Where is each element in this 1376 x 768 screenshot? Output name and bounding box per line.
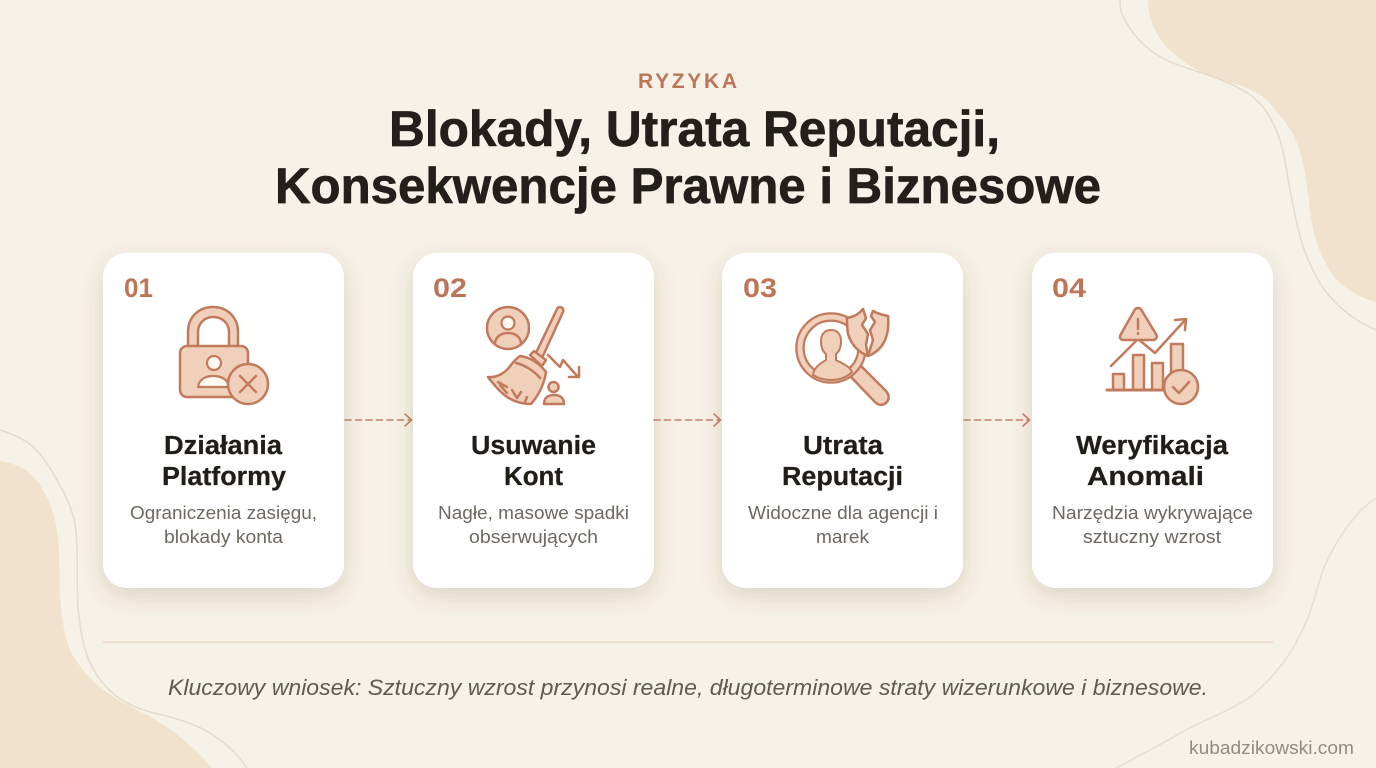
card 4: Weryfikacja Anomali (1032, 253, 1273, 588)
card description: obserwujących (469, 527, 598, 547)
card 2: Usuwanie Kont (413, 253, 654, 588)
card title (471, 432, 596, 491)
card title (162, 432, 287, 491)
card title: Działania (164, 432, 283, 460)
card description (438, 503, 629, 547)
card description (1052, 503, 1253, 547)
key takeaway: Kluczowy wniosek: Sztuczny wzrost przynosi realne, długoterminowe straty wizerunkowe i biznesowe. (168, 675, 1208, 700)
card title: Anomali (1087, 463, 1204, 491)
eyebrow label: RYZYKA (638, 70, 737, 93)
card title: Usuwanie (471, 432, 596, 460)
card description: marek (816, 527, 870, 547)
number 03: 03 (743, 273, 777, 303)
icon: magnifier with broken shield (800, 309, 889, 405)
card title (782, 432, 903, 491)
number 02: 02 (433, 273, 467, 303)
divider line (103, 642, 1273, 643)
arrow 1 to 2 (345, 414, 412, 426)
card 1: Działania Platformy (103, 253, 344, 588)
card title (1076, 432, 1229, 491)
title: Blokady, Utrata Reputacji, (389, 101, 1000, 157)
title (275, 101, 1101, 214)
card title: Platformy (162, 463, 287, 491)
background outline: bottom right (1116, 498, 1376, 768)
number 04: 04 (1052, 273, 1086, 303)
card description: Narzędzia wykrywające (1052, 503, 1253, 523)
background outline: bottom left (0, 430, 247, 768)
card 3: Utrata Reputacji (722, 253, 963, 588)
card description: sztuczny wzrost (1083, 527, 1221, 547)
arrow 2 to 3 (654, 414, 720, 426)
card description (130, 503, 317, 547)
icon: locked user with x (180, 307, 268, 404)
icon: broom sweeping user (487, 307, 579, 404)
number 01: 01 (124, 273, 153, 303)
card title: Weryfikacja (1076, 432, 1229, 460)
card title: Utrata (803, 432, 884, 460)
icon: growth chart with warning and check (1107, 308, 1198, 404)
card description: Widoczne dla agencji i (748, 503, 938, 523)
title: Konsekwencje Prawne i Biznesowe (275, 158, 1101, 214)
arrow 3 to 4 (964, 414, 1030, 426)
background blob: bottom left (0, 461, 212, 768)
card description: Nagłe, masowe spadki (438, 503, 629, 523)
footer website: kubadzikowski.com (1189, 738, 1354, 758)
card description (748, 503, 938, 547)
background outline: top right (1120, 0, 1376, 330)
card description: blokady konta (164, 527, 284, 547)
card description: Ograniczenia zasięgu, (130, 503, 317, 523)
background blob: top right (1148, 0, 1376, 302)
card title: Reputacji (782, 463, 903, 491)
card title: Kont (504, 463, 564, 491)
